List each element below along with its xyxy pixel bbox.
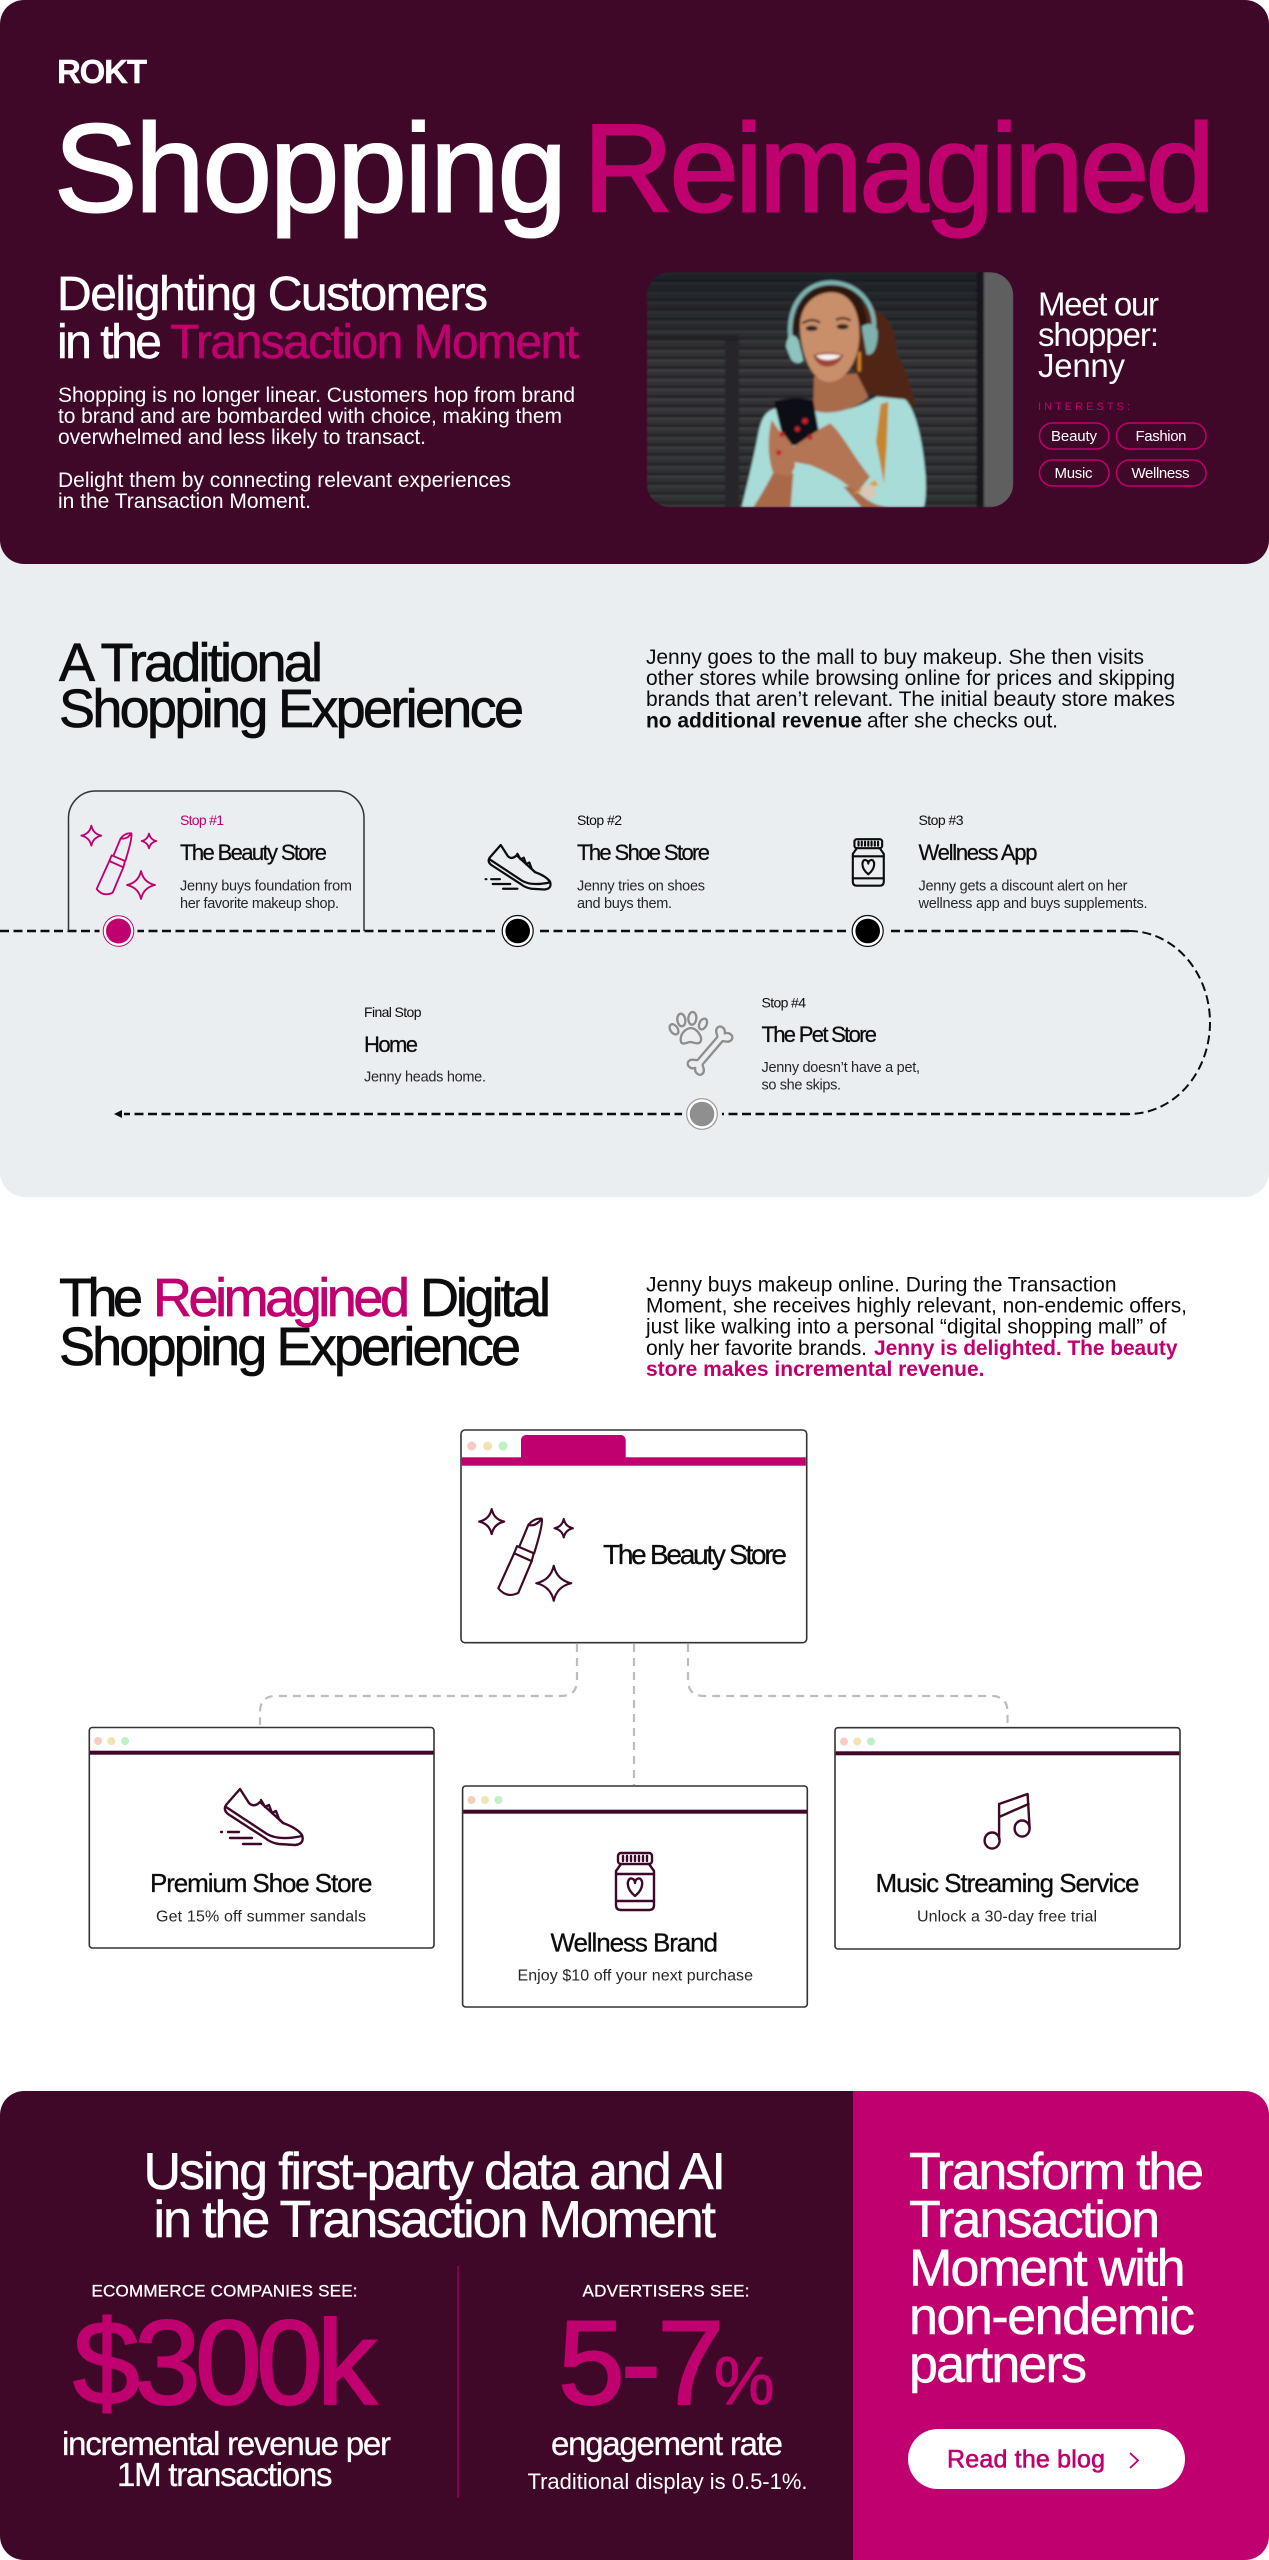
browser: premium shoe store: Get 15% off summer sandals [156,1908,366,1926]
icon: supplement bottle [616,1853,654,1910]
stat: ecommerce companies: incremental revenue per [62,2425,391,2462]
subtitle: in the [57,316,162,369]
text: reimagined journey description: Jenny buys makeup online. During the Transaction [646,1274,1116,1296]
text: reimagined journey description: Moment, she receives highly relevant, non-endemic offers, [646,1294,1187,1318]
shopper intro: Meet our [1038,286,1159,322]
arms [753,473,793,507]
browser: music streaming service [835,1728,1180,1949]
text: traditional journey description [646,646,1175,732]
neck [813,373,868,413]
divider [458,2266,459,2498]
stop 4 text: so she skips. [762,1078,841,1094]
final stop text: Home [364,1032,418,1057]
stop 3 text: Jenny gets a discount alert on her [918,878,1128,894]
headphones [790,283,874,340]
smile [813,352,843,367]
call to action heading: partners [909,2336,1087,2394]
stop 2 text [577,812,710,912]
stop 4 text: Jenny doesn’t have a pet, [762,1060,920,1076]
stop 3 marker [849,912,887,950]
final stop text: Jenny heads home. [364,1070,486,1086]
stop 4 text: The Pet Store [762,1022,877,1047]
final stop text [364,1004,486,1086]
text: traditional journey description: other stores while browsing online for prices and skipping [646,667,1175,690]
heading: the reimagined digital shopping experience: Shopping Experience [59,1317,521,1377]
title: Reimagined [583,100,1215,238]
heading: the reimagined digital shopping experience: Digital [420,1268,551,1328]
watch [852,480,878,495]
hair top [793,286,868,336]
text: reimagined journey description: just like walking into a personal “digital shopping mall” of [645,1316,1167,1338]
stop 4 text [762,994,920,1094]
shopper intro: Jenny [1038,347,1126,384]
interest pills: Beauty [1051,428,1098,445]
browser: wellness brand: Wellness Brand [550,1928,718,1958]
title [54,100,1215,238]
interest pills: Music [1054,465,1093,482]
browser: premium shoe store: Premium Shoe Store [150,1868,372,1898]
text: reimagined journey description [645,1274,1187,1381]
stop 2 text: Stop #2 [577,812,622,828]
stat: ecommerce companies [62,2282,391,2493]
interest pills: Wellness [1132,465,1190,482]
heading: a traditional shopping experience [59,633,524,739]
icon: shoe, stop 2 [486,845,551,890]
stat: advertisers: % [714,2343,774,2419]
intro text: to brand and are bombarded with choice, making them [58,405,562,428]
stop 3 text: wellness app and buys supplements. [918,896,1148,912]
stat: advertisers: ADVERTISERS SEE: [582,2282,750,2300]
call to action heading: Transaction [909,2191,1160,2249]
shopper intro [1038,286,1159,384]
text: reimagined journey description: only her favorite brands. [646,1337,867,1360]
shopper intro: shopper: [1038,316,1159,353]
intro text [58,384,575,513]
results heading: Using first-party data and AI [144,2143,726,2201]
browser: wellness brand [463,1786,807,2007]
text: reimagined journey description: Jenny is delighted. The beauty [874,1337,1178,1360]
browser: the beauty store [461,1430,807,1643]
stop 1 text: Stop #1 [180,812,224,828]
stop 1 text [180,812,352,912]
connectors [260,1644,1008,1785]
call to action heading: non-endemic [909,2288,1195,2346]
icon: supplement bottle, stop 3 [853,839,884,886]
browser: the beauty store: The Beauty Store [603,1539,787,1570]
intro text: Shopping is no longer linear. Customers hop from brand [58,384,575,407]
stat: advertisers: engagement rate [551,2425,783,2462]
stop 4 marker [682,1094,722,1134]
heading: the reimagined digital shopping experience: Reimagined [153,1268,410,1328]
stop 3 text: Stop #3 [918,812,964,828]
stop 1 text: The Beauty Store [180,840,327,865]
title: Shopping [54,100,567,238]
browser: music streaming service: Music Streaming Service [876,1868,1140,1898]
icon: paw and bone, stop 4 [668,1012,734,1076]
text: reimagined journey description: store makes incremental revenue. [646,1358,984,1381]
call to action heading [909,2143,1204,2394]
stop 2 text: The Shoe Store [577,840,710,865]
phone [774,398,821,447]
timeline path [0,931,1210,1118]
eyes and brows [802,318,851,323]
browser: premium shoe store [89,1728,434,1948]
stat: advertisers: 5-7 [558,2296,724,2430]
subtitle [57,268,579,369]
stat: advertisers [528,2282,808,2494]
stop 4 text: Stop #4 [762,994,806,1010]
stop 2 text: and buys them. [577,896,672,912]
icon: lipstick, stop 1 [81,826,156,899]
hands [769,420,795,477]
text: traditional journey description: Jenny goes to the mall to buy makeup. She then visits [646,646,1144,669]
panel: traditional shopping experience background [0,530,1269,1197]
button: read the blog [908,2429,1185,2489]
heading: a traditional shopping experience: Shopping Experience [59,679,524,739]
highlight box: stop 1 [68,791,364,931]
heading: a traditional shopping experience: A Traditional [59,633,323,693]
stop 3 text: Wellness App [918,840,1038,865]
hair [853,303,915,407]
heading: the reimagined digital shopping experience: The [59,1268,143,1328]
panel: call to action [853,2091,1269,2560]
icon: shoe [221,1789,303,1845]
text: traditional journey description: brands that aren’t relevant. The initial beauty store makes [646,688,1175,711]
panel: results [0,2091,853,2560]
interest pills: Fashion [1136,428,1186,445]
stop 2 text: Jenny tries on shoes [577,878,705,894]
stat: ecommerce companies: 1M transactions [117,2456,332,2493]
call to action heading: Moment with [909,2240,1186,2298]
results heading [144,2143,726,2249]
photo: Jenny with headphones and phone [647,272,1014,507]
stat: advertisers: Traditional display is 0.5-1%. [528,2469,808,2494]
intro text: Delight them by connecting relevant experiences [58,469,511,492]
results heading: in the Transaction Moment [154,2191,717,2249]
stat: ecommerce companies: $300k [73,2296,378,2430]
browser: music streaming service: Unlock a 30-day free trial [917,1908,1097,1926]
heading: the reimagined digital shopping experience [59,1268,551,1377]
stat: ecommerce companies: ECOMMERCE COMPANIES SEE: [92,2282,358,2300]
interest pills [1040,423,1206,486]
subtitle: Delighting Customers [57,268,488,321]
intro text: overwhelmed and less likely to transact. [58,426,426,449]
interests label: INTERESTS: [1038,401,1130,413]
browser: wellness brand: Enjoy $10 off your next purchase [518,1968,753,1984]
stop 1 text: Jenny buys foundation from [180,878,352,894]
text: traditional journey description: no additional revenue [646,710,862,732]
text: traditional journey description: after she checks out. [867,710,1058,732]
stop 2 marker [499,912,537,950]
logo: ROKT: ROKT [57,53,147,90]
intro text: in the Transaction Moment. [58,490,311,513]
button: read the blog: Read the blog [947,2446,1105,2474]
panel: header [0,0,1269,564]
sweater [742,397,926,507]
strap [876,402,888,483]
subtitle: Transaction Moment [170,316,579,369]
face [800,292,859,382]
stop 3 text [918,812,1148,912]
call to action heading: Transform the [909,2143,1204,2201]
stop 1 text: her favorite makeup shop. [180,896,339,912]
final stop text: Final Stop [364,1004,422,1020]
stop 1 marker [100,912,138,950]
icon: music note [985,1794,1030,1848]
icon: lipstick [479,1509,573,1601]
